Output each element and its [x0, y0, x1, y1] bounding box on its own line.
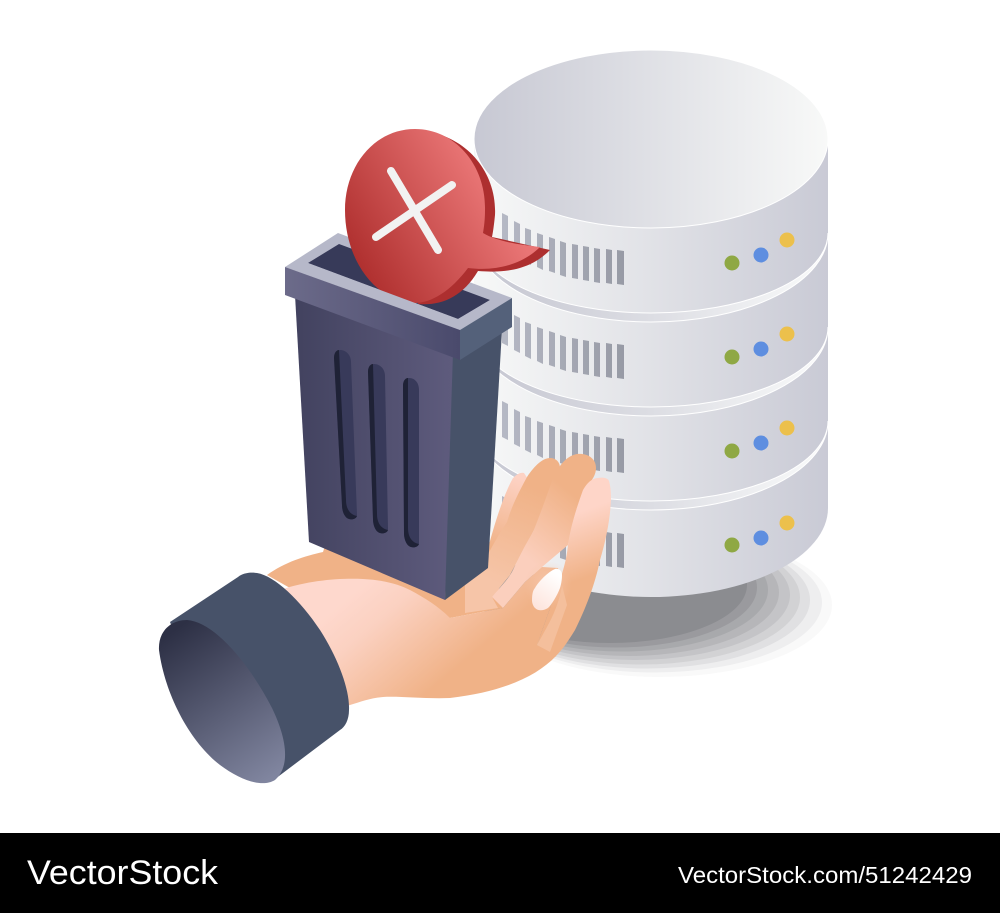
- bubble side: [418, 132, 550, 304]
- vents tier 4: [502, 496, 624, 568]
- slot 2: [368, 364, 388, 533]
- rim right: [460, 298, 512, 360]
- trash can front: [285, 263, 512, 600]
- status lights tier 3: [724, 420, 794, 458]
- tier 2 rim: [474, 327, 828, 416]
- brand name: VectorStock: [27, 854, 219, 892]
- database server: [474, 50, 828, 597]
- slot 3: [403, 378, 419, 547]
- vents tier 3: [502, 401, 624, 473]
- status lights tier 2: [724, 326, 794, 364]
- middle finger: [492, 454, 596, 608]
- thumb mound: [524, 561, 572, 609]
- vents tier 2: [502, 307, 624, 379]
- hand: [267, 454, 611, 708]
- rim front: [285, 267, 460, 360]
- can opening: [308, 244, 490, 319]
- shirt cuff: [159, 573, 349, 783]
- tier 3 rim: [474, 421, 828, 510]
- palm crease: [537, 585, 567, 652]
- bubble face: [345, 129, 540, 303]
- can right face: [445, 330, 502, 600]
- slot 1: [334, 350, 357, 519]
- can front face: [295, 295, 458, 600]
- pinky finger: [485, 473, 528, 575]
- status lights tier 1: [724, 232, 794, 270]
- rim near edge: [285, 263, 512, 330]
- trash can back: [285, 233, 512, 330]
- cuff band: [170, 573, 349, 779]
- palm: [280, 567, 560, 708]
- vents tier 1: [502, 213, 624, 285]
- cuff opening: [159, 620, 285, 783]
- back of hand: [267, 530, 503, 618]
- ring finger: [465, 458, 560, 613]
- server top: [474, 50, 828, 228]
- server body: [474, 139, 828, 597]
- image URL: VectorStock.com/51242429: [678, 862, 972, 888]
- rim top: [285, 233, 512, 330]
- thumbnail: [532, 569, 562, 610]
- cross mark: [376, 171, 452, 250]
- index finger: [537, 478, 611, 657]
- footer bar: [0, 833, 1000, 913]
- ground shadow: [473, 527, 832, 677]
- tier 1 rim: [474, 233, 828, 322]
- speech bubble: [345, 129, 550, 304]
- status lights tier 4: [724, 516, 794, 552]
